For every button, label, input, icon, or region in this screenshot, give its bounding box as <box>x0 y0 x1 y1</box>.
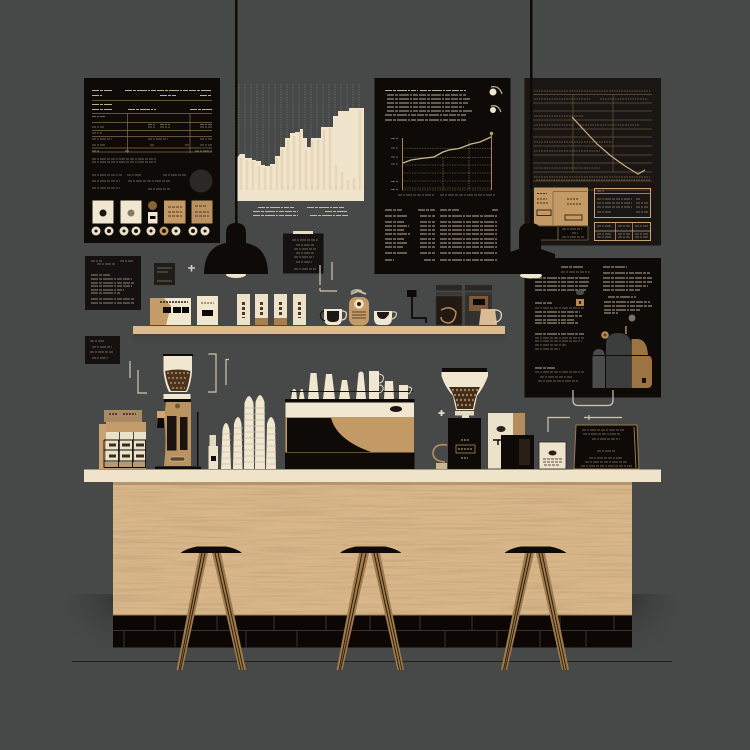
poster price tables <box>385 210 498 260</box>
poster: lower right coffee info <box>524 258 661 398</box>
note: left black card <box>85 256 141 310</box>
line chart <box>391 132 495 195</box>
stool 2 <box>336 546 404 670</box>
chart grid <box>239 84 359 165</box>
lighter bars <box>241 110 360 190</box>
grinder body <box>164 402 191 466</box>
poster: down-trending chart <box>524 78 661 246</box>
dark boxes under card <box>534 226 588 240</box>
poster intro text <box>385 90 472 120</box>
machine top bar <box>285 399 414 402</box>
lamp glow <box>226 271 246 278</box>
jar 2 <box>465 285 492 325</box>
coffee bag rack <box>99 410 146 469</box>
floor line <box>72 661 672 662</box>
coffee bag <box>349 291 369 326</box>
coffee bag silhouettes <box>592 326 652 388</box>
area chart poster <box>237 84 364 216</box>
hopper top <box>442 368 487 372</box>
falling trend line <box>572 117 645 174</box>
machine tan and black panel <box>286 417 414 453</box>
cup 2 <box>374 311 396 325</box>
cup 1 <box>320 309 346 325</box>
machine logo <box>390 406 402 412</box>
poster round icons <box>92 226 210 236</box>
small badge icons <box>576 290 636 339</box>
hanging menu board <box>283 231 324 274</box>
left grinder <box>155 354 201 469</box>
tan info card <box>534 188 588 226</box>
cream stepped area <box>237 108 364 201</box>
cups on top <box>291 371 408 399</box>
black hook stand <box>407 290 426 323</box>
sparkle <box>438 410 444 416</box>
poster dark circle <box>190 170 212 192</box>
book <box>197 296 218 325</box>
counter top <box>84 470 661 482</box>
lamp glow <box>520 272 542 278</box>
poster table text <box>92 90 212 189</box>
hopper <box>163 354 193 392</box>
pendant lamp right <box>510 0 555 278</box>
note: small sign <box>154 263 175 285</box>
machine base <box>285 452 414 469</box>
stool 3 <box>501 546 569 670</box>
info headings and paragraphs <box>535 267 652 381</box>
wall brackets right <box>548 390 622 432</box>
brackets around grinder <box>130 354 229 393</box>
black box <box>493 435 534 469</box>
counter wood front <box>113 482 632 615</box>
black sign <box>574 425 639 469</box>
note: small card below <box>85 336 120 364</box>
retail box <box>488 413 525 468</box>
chart captions <box>253 208 348 216</box>
chart grid and labels <box>533 91 652 190</box>
poster: line chart and tables <box>374 78 510 274</box>
small bottle <box>208 435 218 469</box>
grinder body <box>448 418 481 469</box>
shelf items <box>150 285 501 326</box>
four boxes <box>237 294 306 325</box>
poster icons <box>490 87 502 113</box>
machine cream panel <box>286 402 414 417</box>
counter side shadow right <box>632 594 695 654</box>
white card <box>539 442 566 469</box>
outlined table 2 <box>594 222 650 240</box>
sparkle <box>188 265 195 272</box>
pendant lamp left <box>204 0 268 278</box>
wall brackets <box>320 262 362 292</box>
mug ring <box>433 445 447 462</box>
poster product cards <box>92 200 212 224</box>
stool 1 <box>176 546 246 670</box>
tan mug <box>479 309 501 325</box>
espresso machine <box>285 371 414 469</box>
brick base <box>113 614 632 648</box>
poster: top left menu <box>84 78 220 243</box>
paper cup stacks <box>221 395 276 469</box>
right grinder <box>433 368 488 469</box>
jar 1 <box>436 285 462 325</box>
outlined table 1 <box>594 188 650 218</box>
counter side shadow left <box>50 594 113 654</box>
shelf shadow <box>133 334 505 348</box>
card with cups <box>150 298 191 325</box>
wooden shelf <box>133 326 505 334</box>
